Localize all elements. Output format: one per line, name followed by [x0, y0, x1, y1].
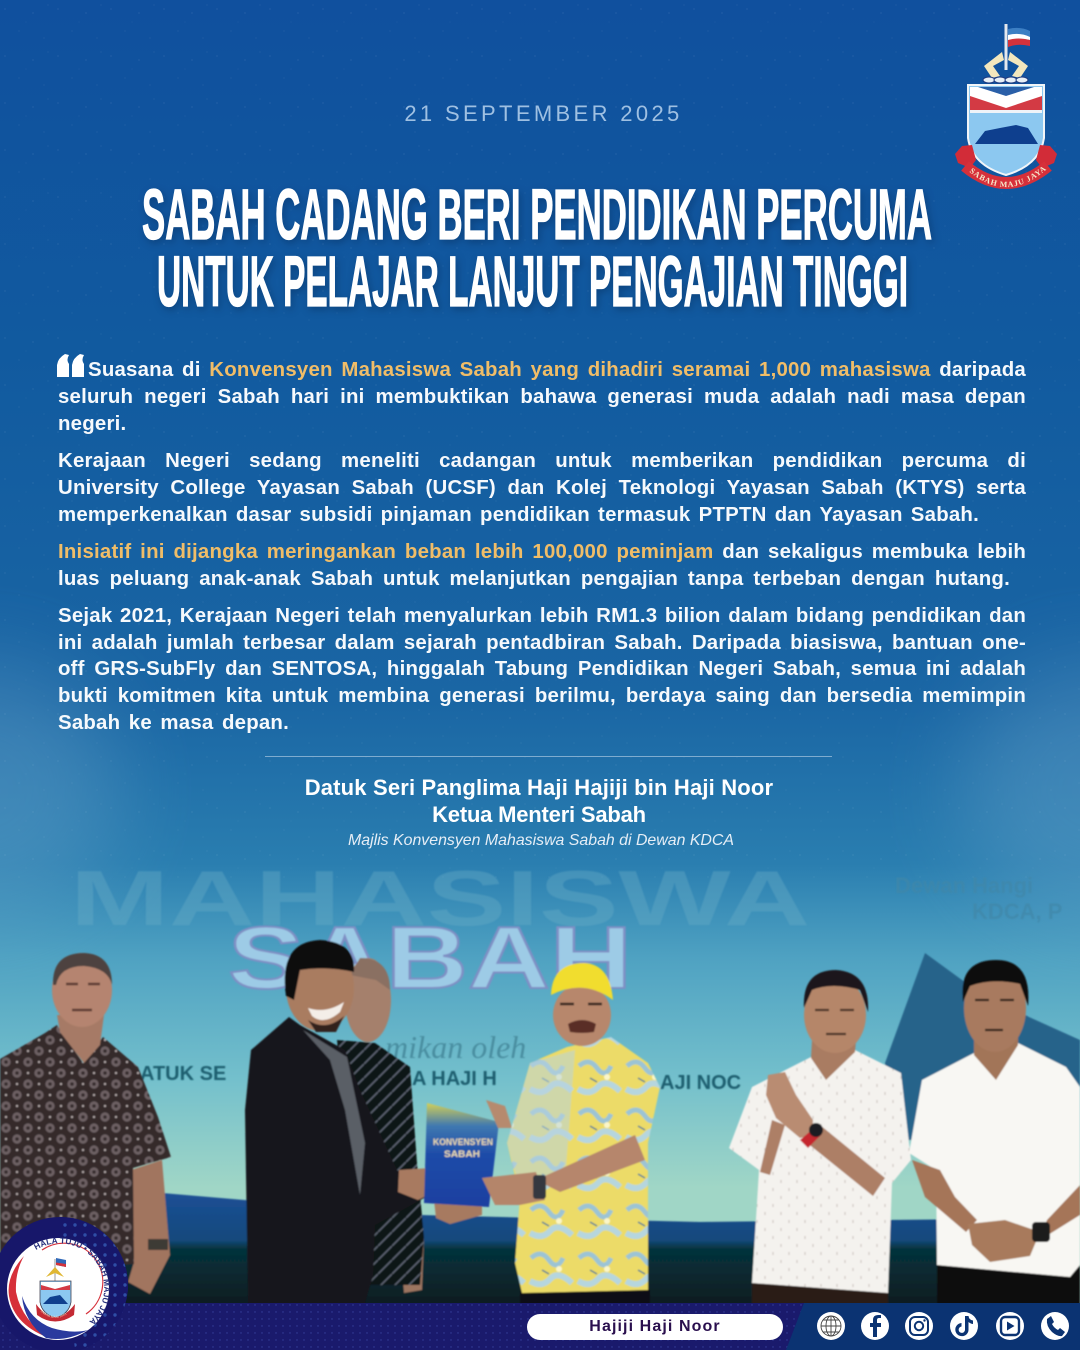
icon: facebook [861, 1312, 889, 1340]
name pill: Hajiji Haji Noor [589, 1318, 721, 1335]
person: centre man in yellow cap [482, 963, 660, 1305]
badge: Hala Tuju logo: SABAH MAJU JAYA [40, 1310, 67, 1318]
stage photo [0, 854, 1080, 1305]
icon: Sabah crest: SABAH MAJU JAYA [970, 167, 1046, 188]
backdrop name text: AJI NOC [660, 1072, 741, 1094]
paragraph 4 [58, 605, 1026, 734]
person: man on the right in white shirt [909, 960, 1080, 1305]
backdrop name text: A HAJI H [412, 1068, 497, 1090]
body text [57, 354, 1026, 734]
icon: phone [1041, 1312, 1069, 1340]
person: man clapping in white shirt [729, 970, 911, 1305]
date: 21 SEPTEMBER 2025 [404, 101, 683, 126]
person: batik man behind [337, 958, 482, 1293]
paragraph 4: Sabah ke masa depan. [58, 712, 289, 734]
icon: Sabah crest [955, 24, 1057, 189]
badge: Hala Tuju logo: HALA TUJU • SABAH MAJU JAYA [34, 1238, 110, 1324]
divider [265, 756, 832, 757]
title [142, 175, 935, 322]
paragraph 1 [58, 359, 1026, 435]
mountain [885, 953, 1080, 1140]
book held by both men: KONVENSYEN [433, 1137, 493, 1147]
person: far left in batik shirt [0, 953, 171, 1294]
name pill [527, 1314, 783, 1340]
paragraph 1: negeri. [58, 413, 126, 435]
paragraph 1: Suasana di Konvensyen Mahasiswa Sabah yang dihadiri seramai 1,000 mahasiswa daripada [88, 359, 1026, 381]
paragraph 3 [58, 541, 1026, 590]
footer bar [0, 1303, 1080, 1350]
quote mark [57, 354, 84, 377]
backdrop venue text: KDCA, P [972, 899, 1062, 924]
social icons row [817, 1312, 1069, 1340]
paragraph 4: Sejak 2021, Kerajaan Negeri telah menyalurkan lebih RM1.3 bilion dalam bidang pendidikan dan [58, 605, 1026, 627]
backdrop script: mikan oleh [385, 1029, 526, 1065]
paragraph 4: bukti komitmen kita untuk membina generasi berilmu, berdaya saing dan bersedia memimpin [58, 685, 1026, 707]
paragraph 1: seluruh negeri Sabah hari ini membuktikan bahawa generasi muda adalah nadi masa depan [58, 386, 1026, 408]
backdrop name text: ATUK SE [140, 1063, 226, 1085]
badge: Hala Tuju logo [0, 1217, 128, 1348]
book held by both men [424, 1103, 499, 1207]
icon: instagram [905, 1312, 933, 1340]
backdrop venue text [895, 873, 1062, 924]
paragraph 2: memperkenalkan dasar subsidi pinjaman pendidikan termasuk PTPTN dan Yayasan Sabah. [58, 504, 979, 526]
icon: globe [817, 1312, 845, 1340]
paragraph 2 [58, 450, 1026, 526]
icon: tiktok [950, 1312, 978, 1340]
paragraph 3: Inisiatif ini dijangka meringankan beban lebih 100,000 peminjam dan sekaligus membuka lebih [58, 541, 1026, 563]
backdrop word SABAH: SABAH [228, 908, 632, 1007]
event line: Majlis Konvensyen Mahasiswa Sabah di Dewan KDCA [348, 832, 734, 849]
backdrop name text [140, 1063, 741, 1094]
icon: youtube [996, 1312, 1024, 1340]
paragraph 2: Kerajaan Negeri sedang meneliti cadangan untuk memberikan pendidikan percuma di [58, 450, 1026, 472]
speaker role: Ketua Menteri Sabah [432, 802, 646, 827]
paragraph 2: University College Yayasan Sabah (UCSF) dan Kolej Teknologi Yayasan Sabah (KTYS) serta [58, 477, 1026, 499]
person: man in black jacket [245, 940, 434, 1303]
speaker name: Datuk Seri Panglima Haji Hajiji bin Haji Noor [305, 775, 773, 800]
signature [305, 775, 773, 849]
paragraph 4: ini adalah jumlah terbesar dalam sejarah pentadbiran Sabah. Daripada biasiswa, bantuan one- [58, 632, 1026, 654]
backdrop venue text: Dewan Hangi [895, 873, 1033, 898]
book held by both men: SABAH [444, 1149, 480, 1159]
paragraph 3: luas peluang anak-anak Sabah untuk melanjutkan pengajian tanpa terbeban dengan hutang. [58, 568, 1010, 590]
paragraph 4: off GRS-SubFly dan SENTOSA, hinggalah Tabung Pendidikan Negeri Sabah, semua ini adalah [58, 658, 1026, 680]
faint backdrop heading: MAHASISWA [70, 854, 810, 942]
sea band [0, 1193, 1080, 1305]
